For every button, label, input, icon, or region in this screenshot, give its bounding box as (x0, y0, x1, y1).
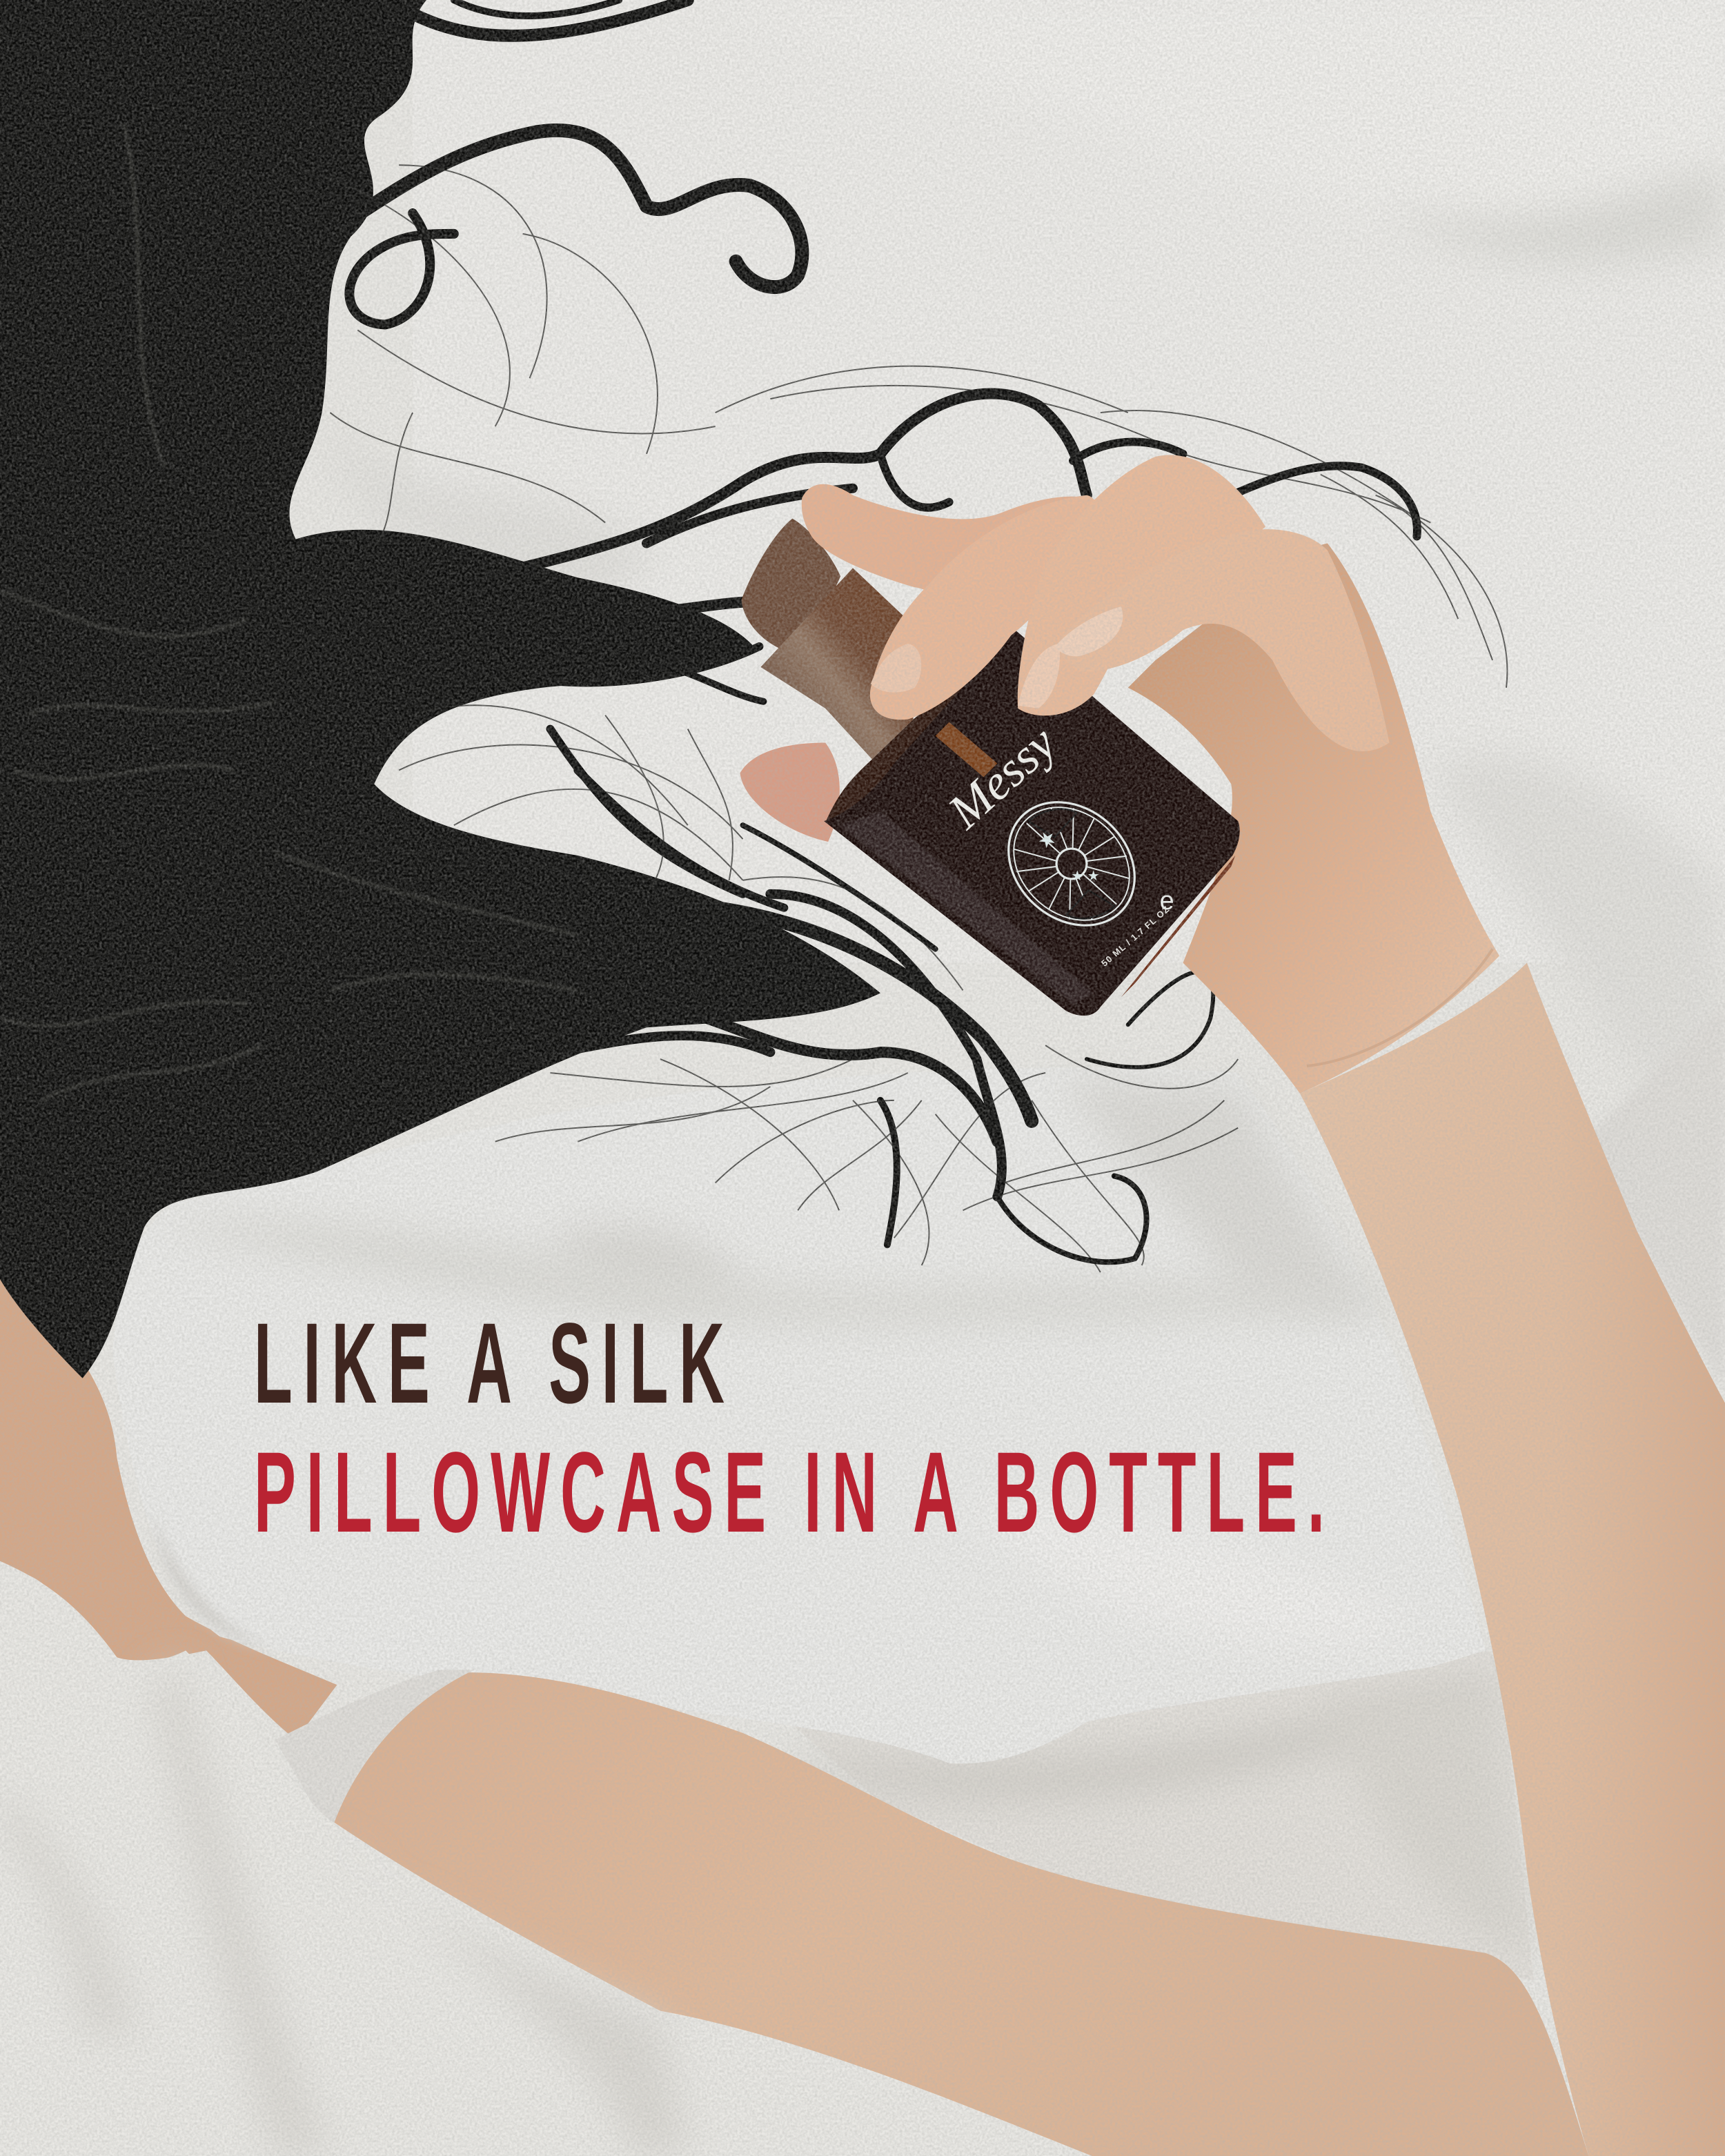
bottle: body (824, 630, 1240, 1016)
tank top strap (275, 1670, 475, 1823)
bedsheet shading (317, 0, 1725, 1981)
wrist crease (1307, 949, 1492, 1066)
headline (254, 1300, 1325, 1556)
hair: fine flyaway strands (330, 165, 1507, 1272)
bottle: collar (760, 568, 914, 759)
headline line 2: PILLOWCASE IN A BOTTLE. (254, 1429, 1325, 1556)
hair: subtle sheen (0, 123, 578, 1100)
skin: shoulder and neck (0, 1272, 337, 1740)
bottle (742, 519, 1240, 1016)
hair: thick curls and locks (317, 0, 1417, 1262)
arm: upper arm across the bottom (334, 1672, 1589, 2156)
bottle label: volume: 50 ML / 1.7 FL OZ (1099, 904, 1172, 969)
bottle: amber glass shoulder (825, 633, 1059, 825)
hand: fourth finger with nail (1055, 529, 1390, 751)
bottle label: oval badge (984, 777, 1159, 951)
arm: forearm on the right (1300, 963, 1725, 2156)
hand: thumb (740, 743, 840, 842)
hair: dark mass (0, 0, 1507, 1378)
bottle label: estimated sign: e (1160, 887, 1174, 916)
bottle: pump cap (742, 519, 840, 649)
hand: third finger with nail (1018, 455, 1265, 715)
bottle label: script logo: Messy (937, 715, 1067, 840)
hand: index finger (802, 484, 1101, 633)
headline line 1: LIKE A SILK (254, 1300, 724, 1427)
hand: second finger with nail (870, 495, 1096, 720)
blanket bottom left (0, 1570, 1094, 2156)
bottle: ★ ★ (1071, 869, 1100, 884)
pillow (112, 1068, 1486, 1763)
bottle label: badge stars: ★ (1033, 825, 1062, 854)
hand: palm behind the bottle (1128, 543, 1499, 1094)
